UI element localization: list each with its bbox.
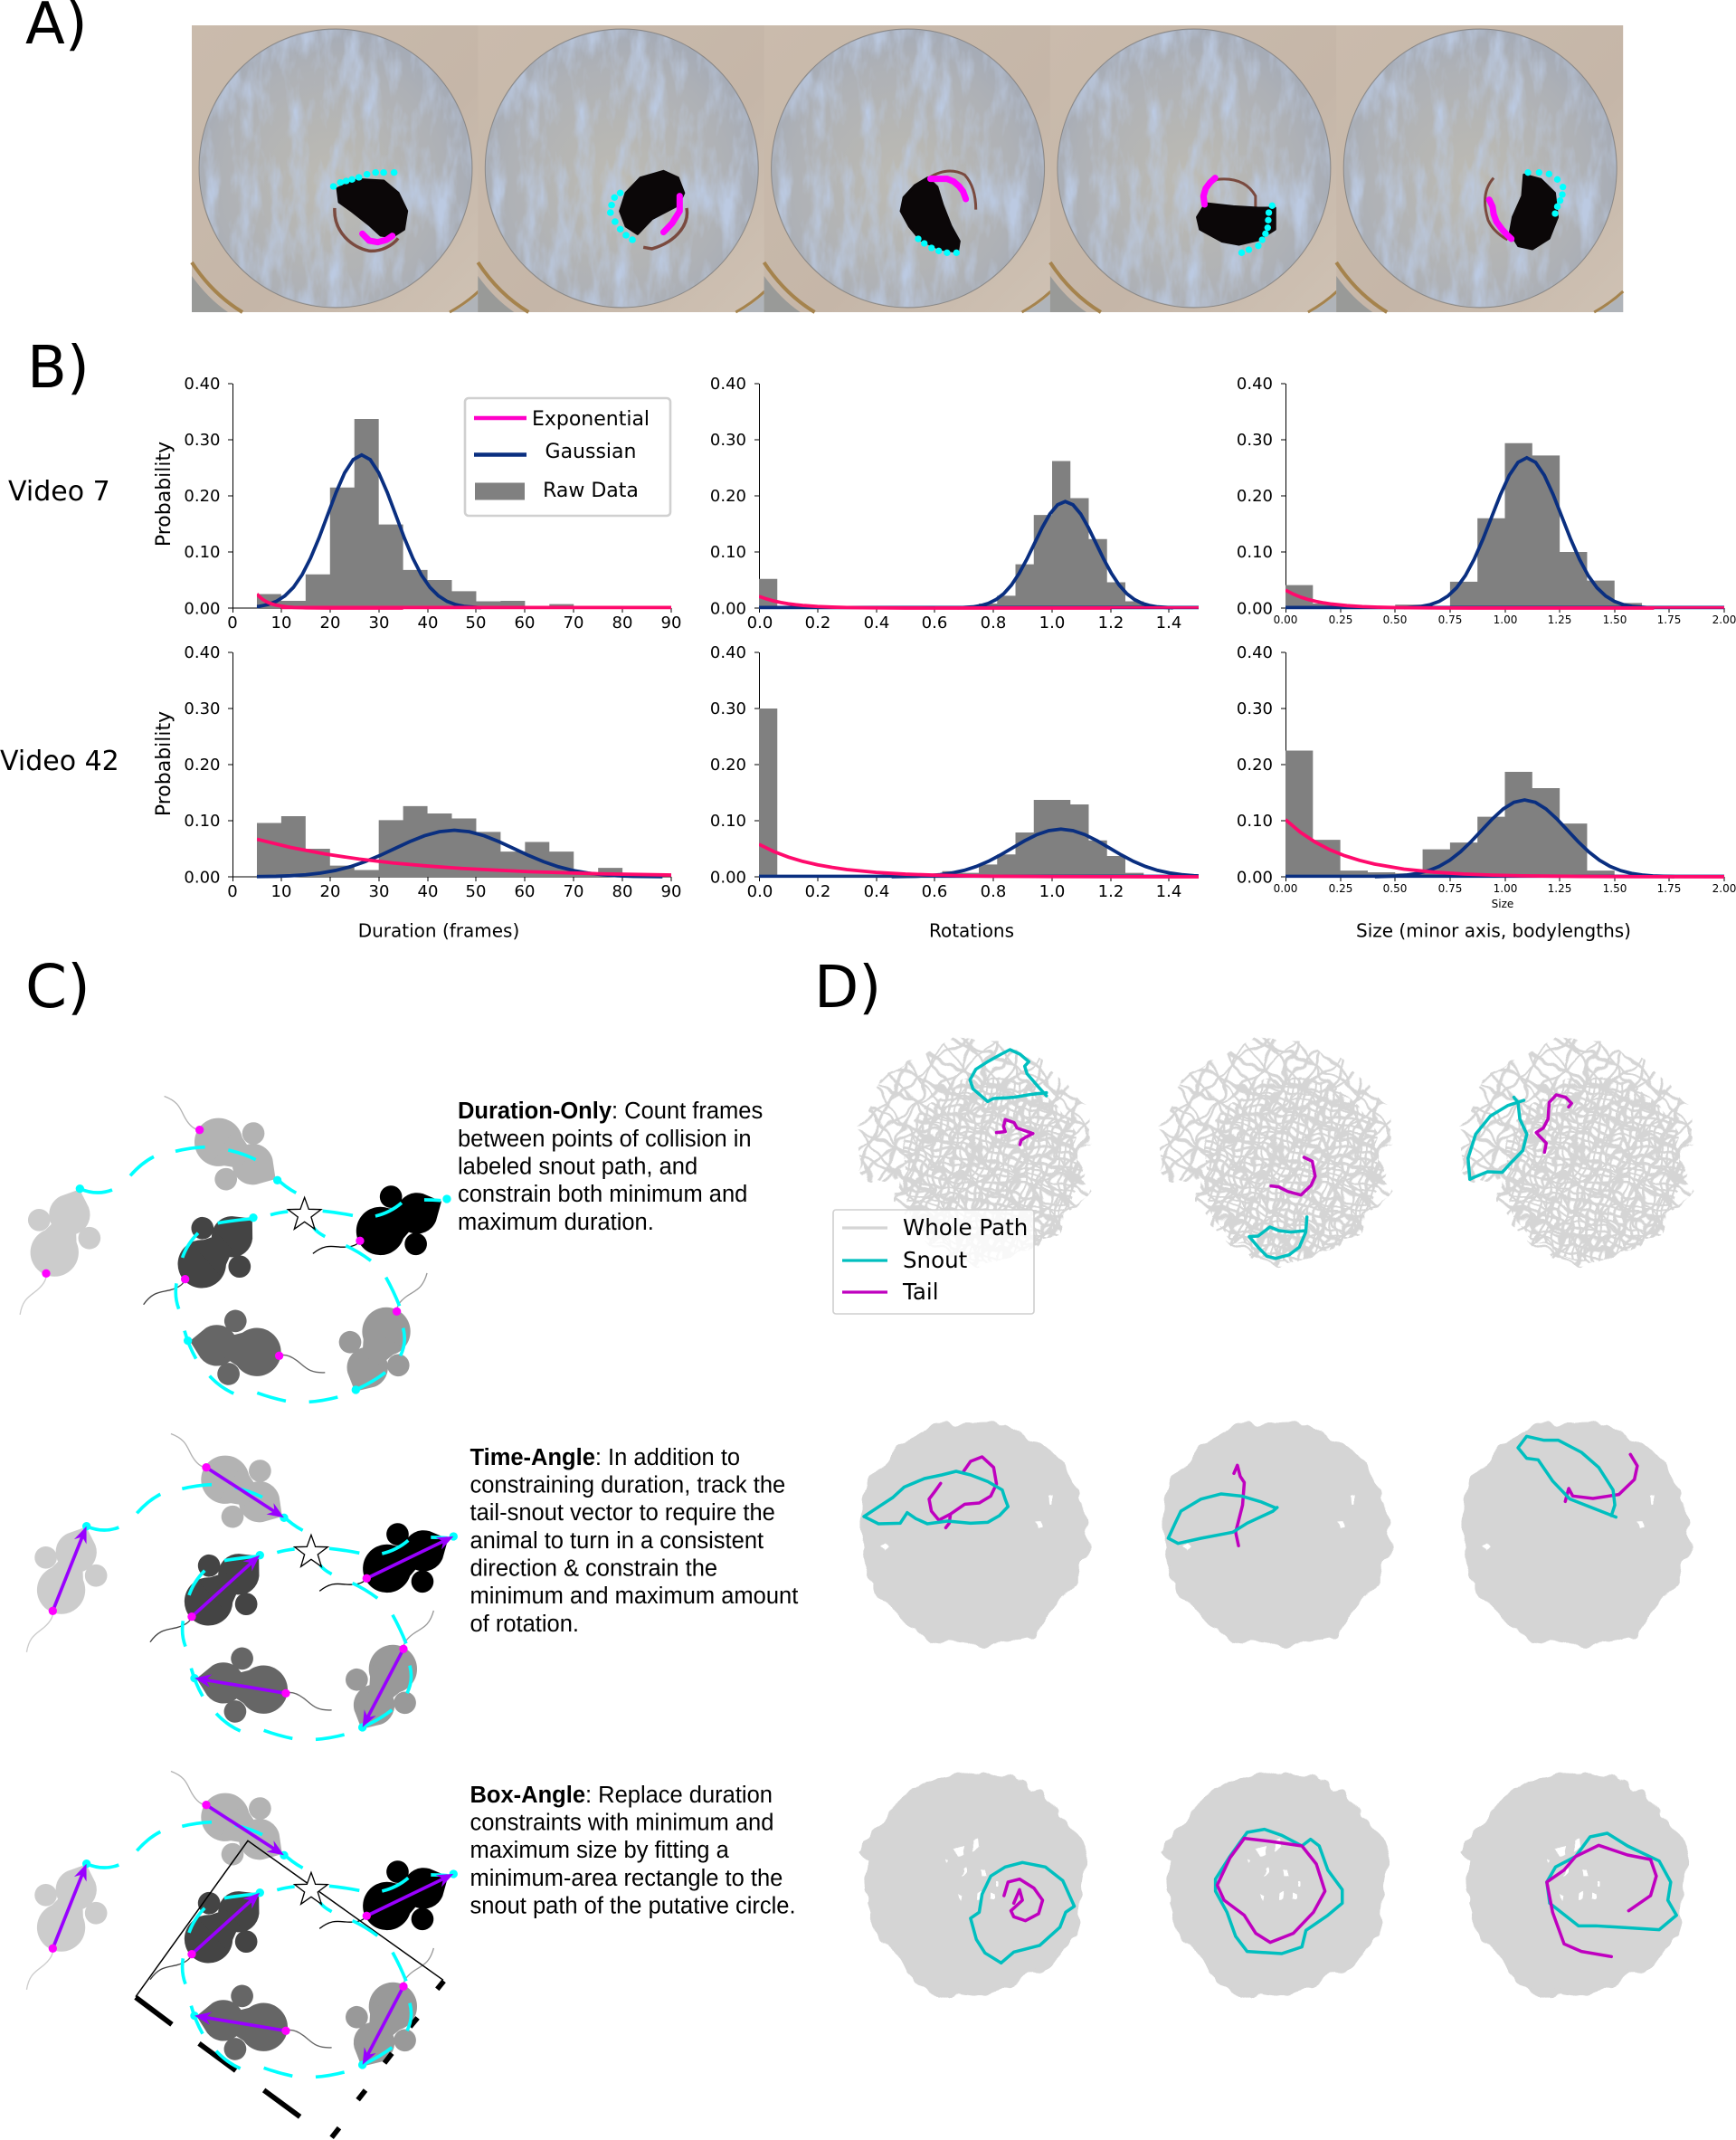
chart: size, video 42: 1.50 — [1603, 882, 1627, 895]
chart: duration, video 42: 0.40 — [184, 643, 221, 662]
row label: Video 42: Video 42 — [0, 746, 119, 777]
chart: duration, video 7: 60 — [515, 613, 535, 632]
chart: rotations, video 42: 1.0 — [1039, 882, 1065, 901]
chart: duration, video 42: 20 — [320, 882, 340, 901]
icon: star collision point — [288, 1197, 321, 1229]
tail markers — [49, 1463, 408, 1698]
chart: duration, video 42: 50 — [466, 882, 486, 901]
legend: whole path, snout, tail: Tail — [902, 1279, 939, 1305]
mouse 3 — [131, 1866, 285, 2015]
chart: duration, video 7: 0 — [227, 613, 238, 632]
chart: size, video 42: 0.00 — [1274, 882, 1297, 895]
text: box-angle description — [470, 1783, 796, 1918]
chart: duration, video 7: 0.00 — [184, 599, 221, 619]
text: duration-only description — [458, 1099, 763, 1235]
chart: rotations, video 7: 0.0 — [747, 613, 773, 632]
chart: size, video 7 — [1237, 375, 1736, 626]
panel D row 2: trajectory plots — [861, 1423, 1687, 1647]
chart: size, video 42 — [1237, 643, 1736, 895]
chart: size, video 7: 0.25 — [1329, 613, 1352, 626]
chart: size, video 7: 2.00 — [1712, 613, 1736, 626]
chart: duration, video 42: 10 — [271, 882, 291, 901]
chart: size, video 7: 1.75 — [1657, 613, 1681, 626]
mouse 6 — [191, 1978, 339, 2076]
snout and tail traces — [970, 1050, 1571, 1259]
chart: size, video 42: 1.25 — [1548, 882, 1571, 895]
chart: size, video 7: 0.40 — [1237, 375, 1273, 394]
photo frame 4 — [1050, 25, 1337, 312]
chart: size, video 42: 1.00 — [1494, 882, 1517, 895]
chart: size, video 42: 0.30 — [1237, 699, 1273, 718]
text: time-angle description: tail-snout vector to require the — [470, 1500, 775, 1526]
chart: rotations, video 7: 0.6 — [922, 613, 947, 632]
diagram: time-angle — [0, 1410, 465, 1746]
chart: duration, video 42: 0 — [227, 882, 238, 901]
mouse 1 — [0, 1850, 122, 2007]
chart: rotations, video 42: 0.10 — [710, 812, 746, 831]
whole path blob column 3 — [1463, 1423, 1687, 1647]
chart: rotations, video 42: 1.2 — [1098, 882, 1124, 901]
text: box-angle description: Box-Angle: Replace duration — [470, 1783, 773, 1808]
row label: Video 7: Video 7 — [8, 476, 110, 508]
panel D row 1: trajectory plots — [850, 1032, 1706, 1276]
minimum-area rectangle — [136, 1840, 444, 2137]
chart: size, video 7: 0.00 — [1274, 613, 1297, 626]
chart: duration, video 42: 40 — [418, 882, 438, 901]
chart: size, video 7: 0.20 — [1237, 487, 1273, 506]
mouse 2 — [145, 1747, 302, 1887]
chart: size, video 42: 0.25 — [1329, 882, 1352, 895]
chart: size, video 7: 0.30 — [1237, 431, 1273, 450]
chart: duration, video 42: 0.20 — [184, 756, 221, 775]
chart: duration, video 7: 0.20 — [184, 487, 221, 506]
diagram: duration-only — [0, 1072, 458, 1409]
chart: size, video 7: 0.00 — [1237, 599, 1273, 619]
chart: duration, video 7: 10 — [271, 613, 291, 632]
y axis label row 2: Probability — [153, 711, 175, 816]
legend: whole path, snout, tail: Snout — [903, 1247, 968, 1273]
chart: duration, video 7: 30 — [369, 613, 389, 632]
text: duration-only description: labeled snout path, and — [458, 1155, 697, 1180]
chart: duration, video 7: 0.10 — [184, 543, 221, 562]
chart: rotations, video 7: 1.2 — [1098, 613, 1124, 632]
chart: rotations, video 7: 0.2 — [805, 613, 830, 632]
chart: duration, video 7 — [184, 375, 681, 632]
chart: size, video 42: 0.75 — [1438, 882, 1462, 895]
dashed snout path — [80, 1147, 441, 1402]
heading: panel D label: D) — [814, 955, 881, 1022]
mouse 3 — [131, 1528, 285, 1678]
chart: duration, video 7: 50 — [466, 613, 486, 632]
text: box-angle description: minimum-area rectangle to the — [470, 1866, 783, 1891]
text: time-angle description: constraining duration, track the — [470, 1473, 785, 1498]
mouse 6 — [191, 1641, 339, 1738]
chart: size, video 7: 0.75 — [1438, 613, 1462, 626]
snout and tail traces — [971, 1830, 1676, 1963]
whole path blob column 3 — [1463, 1770, 1687, 1995]
chart: size, video 7: 0.50 — [1383, 613, 1407, 626]
text: duration-only description: Duration-Only: Count frames — [458, 1099, 763, 1124]
chart: rotations, video 42: 0.40 — [710, 643, 746, 662]
photo frame 1 — [192, 25, 479, 312]
text: duration-only description: constrain both minimum and — [458, 1182, 747, 1207]
whole path blob column 1 — [861, 1423, 1086, 1647]
legend: whole path, snout, tail — [833, 1210, 1034, 1314]
chart: size, video 42: 1.75 — [1657, 882, 1681, 895]
chart: rotations, video 42: 0.2 — [805, 882, 830, 901]
whole path blob column 2 — [1163, 1770, 1388, 1995]
chart: rotations, video 42: 0.6 — [922, 882, 947, 901]
chart: rotations, video 42: 1.4 — [1156, 882, 1181, 901]
dashed snout path — [87, 1822, 448, 2077]
chart: duration, video 42: 90 — [661, 882, 681, 901]
mouse 2 — [138, 1072, 296, 1212]
diagram: box-angle — [0, 1747, 465, 2137]
chart: size, video 42: 0.00 — [1237, 869, 1273, 887]
small axis label: Size: Size — [1492, 898, 1513, 910]
mouse 5 — [327, 1589, 459, 1746]
chart: duration, video 7: 0.40 — [184, 375, 221, 394]
icon: star collision point — [295, 1535, 327, 1566]
photo frame 3 — [764, 25, 1051, 312]
chart: rotations, video 42: 0.20 — [710, 756, 746, 775]
chart: rotations, video 42 — [711, 646, 1199, 898]
whole path tangle column 2 — [1152, 1032, 1405, 1276]
snout markers — [82, 1851, 458, 2069]
chart: rotations, video 7: 0.00 — [710, 599, 746, 619]
heading: panel B label: B) — [27, 335, 90, 402]
photo frame 5 — [1336, 25, 1623, 312]
panel D row 3: trajectory plots — [861, 1770, 1687, 1995]
whole path tangle column 1 — [858, 1037, 1091, 1247]
legend: whole path, snout, tail: Whole Path — [903, 1214, 1028, 1241]
chart: rotations, video 7: 0.10 — [710, 543, 746, 562]
chart: duration, video 7: 40 — [418, 613, 438, 632]
text: time-angle description — [470, 1445, 798, 1637]
chart: rotations, video 42: 0.0 — [747, 882, 773, 901]
mouse 3 — [125, 1191, 278, 1340]
chart: size, video 42: 0.20 — [1237, 756, 1273, 775]
dashed snout path — [87, 1485, 448, 1739]
chart: rotations, video 7: 1.0 — [1039, 613, 1065, 632]
x axis label: rotations: Rotations — [929, 919, 1014, 941]
chart: duration, video 42: 0.10 — [184, 812, 221, 831]
mouse 1 — [0, 1175, 115, 1332]
snout and tail traces — [864, 1436, 1637, 1546]
text: box-angle description: snout path of the putative circle. — [470, 1893, 796, 1918]
text: duration-only description: between points of collision in — [458, 1127, 752, 1152]
chart: size, video 42: 0.50 — [1383, 882, 1407, 895]
chart legend: exponential, gaussian, raw data: Exponential — [532, 408, 650, 431]
chart: duration, video 42 — [185, 646, 680, 898]
whole path blob column 2 — [1163, 1423, 1388, 1647]
chart: rotations, video 42: 0.00 — [710, 869, 746, 887]
mouse 4 — [300, 1168, 458, 1296]
chart: rotations, video 7: 0.30 — [710, 431, 746, 450]
whole path tangle column 3 — [1453, 1032, 1706, 1276]
chart: rotations, video 7: 0.40 — [710, 375, 746, 394]
chart: size, video 7: 1.00 — [1494, 613, 1517, 626]
chart: duration, video 7: 0.30 — [184, 431, 221, 450]
chart: size, video 7: 1.50 — [1603, 613, 1627, 626]
tail-snout vector arrows — [47, 1462, 457, 1730]
chart: duration, video 42: 0.00 — [184, 869, 221, 887]
mouse 4 — [308, 1843, 465, 1971]
chart: size, video 42: 0.10 — [1237, 812, 1273, 831]
mouse 5 — [327, 1926, 459, 2084]
panel A: photo strip — [192, 25, 1623, 312]
chart: rotations, video 7: 1.4 — [1156, 613, 1181, 632]
x axis label: size: Size (minor axis, bodylengths) — [1356, 919, 1631, 941]
chart: rotations, video 42: 0.4 — [864, 882, 889, 901]
photo frame 2 — [478, 25, 764, 312]
chart legend: exponential, gaussian, raw data: Gaussian — [545, 441, 636, 463]
text: box-angle description: constraints with minimum and — [470, 1811, 773, 1836]
whole path blob column 1 — [861, 1770, 1086, 1995]
mouse 4 — [308, 1506, 465, 1633]
snout markers — [82, 1514, 458, 1732]
chart: size, video 7: 1.25 — [1548, 613, 1571, 626]
text: duration-only description: maximum duration. — [458, 1210, 654, 1235]
snout and tail markers — [42, 1126, 451, 1394]
text: time-angle description: direction & constrain the — [470, 1555, 717, 1581]
mouse 1 — [0, 1513, 122, 1669]
tail markers — [49, 1801, 408, 2035]
text: box-angle description: maximum size by fitting a — [470, 1838, 730, 1863]
chart: duration, video 42: 70 — [564, 882, 583, 901]
chart: rotations, video 7: 0.8 — [981, 613, 1006, 632]
chart: rotations, video 42: 0.8 — [981, 882, 1006, 901]
tail-snout vector arrows — [47, 1800, 457, 2068]
mouse 6 — [184, 1303, 333, 1401]
mouse 5 — [321, 1251, 452, 1409]
chart: size, video 7: 0.10 — [1237, 543, 1273, 562]
text: time-angle description: minimum and maximum amount — [470, 1584, 798, 1609]
chart: duration, video 7: 70 — [564, 613, 583, 632]
chart: rotations, video 7: 0.4 — [864, 613, 889, 632]
icon: star collision point — [295, 1872, 327, 1904]
y axis label row 1: Probability — [153, 442, 175, 547]
chart: rotations, video 7 — [710, 375, 1199, 632]
chart: duration, video 42: 30 — [369, 882, 389, 901]
text: time-angle description: animal to turn in a consistent — [470, 1528, 764, 1554]
chart: duration, video 7: 80 — [612, 613, 632, 632]
chart: duration, video 7: 20 — [320, 613, 340, 632]
mouse 2 — [145, 1410, 302, 1549]
chart: duration, video 42: 80 — [612, 882, 632, 901]
chart: size, video 42: 0.40 — [1237, 643, 1273, 662]
chart: duration, video 42: 60 — [515, 882, 535, 901]
chart: duration, video 7: 90 — [661, 613, 681, 632]
chart: duration, video 42: 0.30 — [184, 699, 221, 718]
text: time-angle description: of rotation. — [470, 1612, 579, 1637]
chart: rotations, video 42: 0.30 — [710, 699, 746, 718]
chart legend: exponential, gaussian, raw data — [465, 398, 670, 516]
x axis label: duration: Duration (frames) — [358, 919, 519, 941]
text: time-angle description: Time-Angle: In addition to — [470, 1445, 740, 1470]
chart: rotations, video 7: 0.20 — [710, 487, 746, 506]
heading: panel C label: C) — [25, 952, 90, 1022]
chart: size, video 42: 2.00 — [1712, 882, 1736, 895]
chart legend: exponential, gaussian, raw data: Raw Data — [543, 480, 639, 502]
